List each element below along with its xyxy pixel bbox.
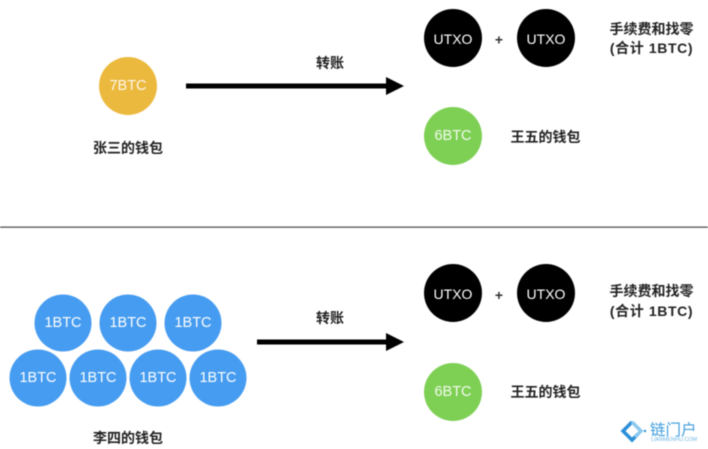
icon group: Li Si 1BTC coins: [10, 294, 246, 406]
label: bottom Wang Wu wallet: 王五的钱包: [510, 384, 580, 400]
text: logo url: LIANMENHU.COM: [651, 437, 697, 443]
icon: bottom UTXO left: UTXO: [434, 286, 473, 302]
label: bottom fee and change: 手续费和找零: [610, 283, 694, 299]
icon: top UTXO left: [424, 9, 482, 67]
icon: bottom 6BTC coin: [424, 363, 482, 421]
label: top fee and change: [610, 21, 694, 56]
icon: Zhang San 7BTC coin: [99, 57, 157, 115]
label: bottom transfer: 转账: [316, 310, 344, 326]
icon group: Li Si 1BTC coins: 1BTC: [44, 315, 82, 331]
panel: top scenario: [93, 9, 694, 165]
icon group: Li Si 1BTC coins: 1BTC: [109, 315, 147, 331]
icon: top UTXO right: UTXO: [527, 31, 566, 47]
icon group: Li Si 1BTC coins: 1BTC: [79, 370, 117, 386]
label: top Wang Wu wallet: 王五的钱包: [510, 129, 580, 145]
label: bottom fee and change: [610, 283, 694, 319]
label: bottom plus: +: [495, 287, 503, 303]
logo: watermark: [623, 421, 697, 443]
icon: bottom UTXO right: UTXO: [527, 286, 566, 302]
label: Li Si wallet: 李四的钱包: [93, 430, 163, 446]
icon: bottom 6BTC coin: 6BTC: [434, 384, 472, 400]
icon: bottom UTXO left: [424, 264, 482, 322]
icon: bottom UTXO right: [517, 264, 575, 322]
icon: top UTXO right: [517, 9, 575, 67]
label: bottom fee and change: (合计 1BTC): [610, 303, 693, 319]
icon: logo diamond: [623, 422, 646, 440]
panel: bottom scenario: [10, 264, 694, 446]
label: top fee and change: 手续费和找零: [610, 21, 694, 37]
icon: top 6BTC coin: 6BTC: [434, 128, 472, 144]
icon: Zhang San 7BTC coin: 7BTC: [109, 78, 147, 94]
icon group: Li Si 1BTC coins: 1BTC: [19, 370, 57, 386]
label: top transfer: 转账: [316, 55, 344, 71]
icon group: Li Si 1BTC coins: 1BTC: [174, 315, 212, 331]
arrow: top transfer: [186, 77, 404, 95]
text: logo name: 链门户: [650, 421, 697, 439]
label: top fee and change: (合计 1BTC): [610, 40, 693, 56]
label: Zhang San wallet: 张三的钱包: [93, 140, 163, 156]
label: top plus: +: [495, 32, 503, 48]
arrow: bottom transfer: [257, 333, 404, 351]
icon group: Li Si 1BTC coins: 1BTC: [139, 370, 177, 386]
icon: top 6BTC coin: [424, 107, 482, 165]
icon group: Li Si 1BTC coins: 1BTC: [199, 370, 237, 386]
icon: top UTXO left: UTXO: [434, 31, 473, 47]
